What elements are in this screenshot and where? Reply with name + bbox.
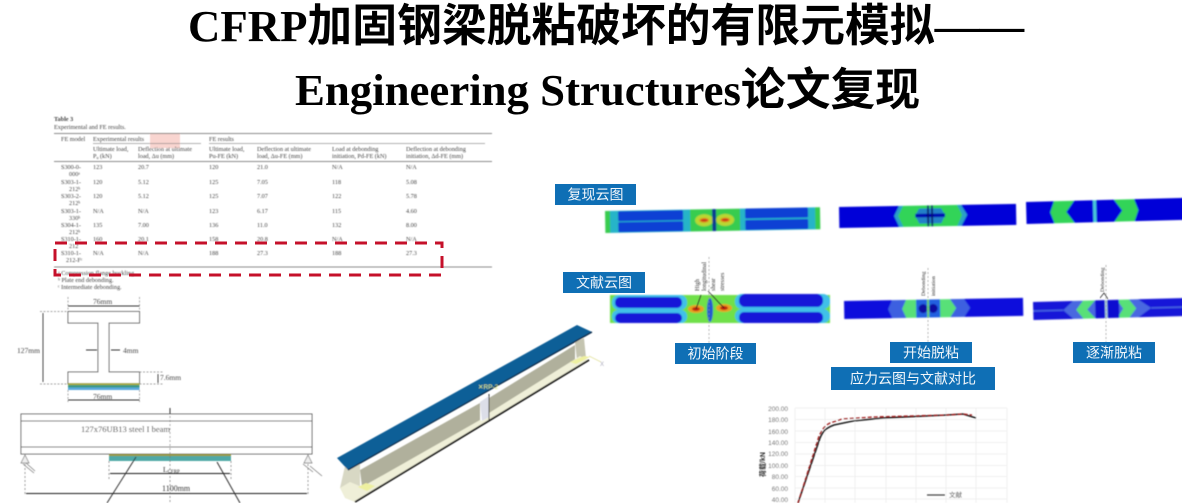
diagram: 3D FE beam model: [337, 325, 604, 502]
panel: results table: 000ᵃ: [69, 171, 80, 178]
chart: load-deflection curve: [758, 406, 1007, 503]
diagram: I-section dimensions: 76mm: [93, 392, 112, 401]
label: 文献云图: 文献云图: [576, 274, 632, 290]
panel: results table: ᵇ Plate end debonding.: [58, 277, 114, 284]
panel: results table: 5.12: [138, 179, 149, 186]
annotation: high longitudinal shear stresses: longitudinal: [702, 262, 708, 291]
annotation: debonding: Debonding: [1100, 267, 1106, 292]
panel: results table: 11.0: [257, 222, 268, 229]
callout: red dashed highlight box: [55, 243, 442, 275]
chart: load-deflection curve: 200.00: [768, 406, 788, 413]
diagram: I-section dimensions: 7.6mm: [160, 373, 181, 382]
label: 复现云图: 复现云图: [568, 186, 624, 202]
panel: results table: Pu-FE (kN): [209, 153, 238, 160]
panel: results table: 212ᵇ: [69, 229, 80, 236]
panel: results table: 125: [209, 193, 218, 200]
panel: results table: 160: [93, 236, 102, 243]
panel: results table: S303-1-: [61, 179, 81, 186]
panel: results table: 21.0: [257, 164, 268, 171]
panel: results table: u: [96, 155, 98, 160]
panel: results table: 188: [209, 250, 218, 257]
annotation: high longitudinal shear stresses: shear: [711, 278, 717, 291]
panel: results table: 212ᵇ: [69, 200, 80, 207]
panel: results table: 7.00: [138, 222, 149, 229]
panel: results table: Deflection at ultimate: [257, 146, 311, 153]
label: 开始脱粘: [890, 342, 972, 363]
panel: results table: 212ᵇ: [69, 186, 80, 193]
panel: results table: 330ᵇ: [69, 215, 80, 222]
panel: results table: N/A: [138, 250, 149, 257]
panel: results table: 123: [93, 164, 102, 171]
panel: results table: Ultimate load,: [93, 146, 129, 153]
diagram: I-section dimensions: [17, 297, 181, 402]
contour: literature debonding initiation: [844, 298, 1023, 319]
panel: results table: 5.08: [406, 179, 417, 186]
panel: results table: load, Δu-FE (mm): [257, 153, 302, 160]
annotation: debonding: [1100, 265, 1108, 342]
panel: results table: 120: [209, 164, 218, 171]
panel: results table: 5.12: [138, 193, 149, 200]
panel: results table: 7.05: [257, 179, 268, 186]
panel: results table: Experimental results: [93, 136, 145, 143]
annotation: high longitudinal shear stresses: High: [695, 279, 701, 291]
contour: reproduced progressive debonding: [1026, 198, 1182, 224]
panel: results table: N/A: [406, 164, 417, 171]
panel: results table: [54, 116, 492, 291]
panel: results table: S310-1-: [61, 236, 81, 243]
diagram: I-section dimensions: 76mm: [93, 297, 112, 306]
panel: results table: (kN): [98, 153, 112, 160]
panel: results table: FE model: [61, 136, 86, 143]
chart: load-deflection curve: 120.00: [768, 451, 788, 458]
annotation: debonding initiation: initiation: [931, 276, 937, 296]
chart: load-deflection curve: 100.00: [768, 463, 788, 470]
panel: results table: 120: [93, 193, 102, 200]
diagram: I-section dimensions: 4mm: [123, 346, 139, 355]
panel: results table: 4.60: [406, 208, 417, 215]
diagram: I-section dimensions: 127mm: [17, 346, 40, 355]
diagram: beam elevation with CFRP plate: 127x76UB13 steel I beam: [81, 424, 170, 434]
annotation: high longitudinal shear stresses: stresses: [720, 272, 726, 291]
title: CFRP加固钢梁脱粘破坏的有限元模拟——: [188, 1, 1025, 51]
panel: results table: 20.8: [257, 236, 268, 243]
panel: results table: 120: [93, 179, 102, 186]
panel: results table: N/A: [138, 208, 149, 215]
panel: results table: ᶜ Intermediate debonding.: [58, 284, 122, 291]
panel: results table: 27.3: [406, 250, 417, 257]
contour: reproduced debonding initiation: [839, 204, 1016, 228]
contour: reproduced initial stage: [605, 207, 820, 233]
panel: results table: 158: [209, 236, 218, 243]
panel: results table: P: [93, 153, 96, 160]
panel: results table: S300-0-: [61, 164, 81, 171]
panel: results table: N/A: [406, 236, 417, 243]
panel: results table: 125: [209, 179, 218, 186]
panel: results table: load, Δu (mm): [138, 153, 174, 160]
label: 复现云图: [555, 184, 636, 205]
diagram: beam elevation with CFRP plate: [21, 408, 322, 503]
panel: results table: N/A: [93, 250, 104, 257]
panel: results table: S303-1-: [61, 208, 81, 215]
panel: results table: 188: [332, 250, 341, 257]
contour: literature initial stage: [610, 294, 830, 323]
label: 开始脱粘: 开始脱粘: [903, 344, 959, 360]
panel: results table: 27.3: [257, 250, 268, 257]
panel: results table: 6.17: [257, 208, 268, 215]
panel: results table: initiation, Pd-FE (kN): [332, 153, 386, 160]
panel: results table: N/A: [93, 208, 104, 215]
panel: results table: 136: [209, 222, 218, 229]
label: 初始阶段: 初始阶段: [688, 346, 744, 362]
chart: load-deflection curve: 160.00: [768, 429, 788, 436]
panel: results table: S303-2-: [61, 193, 81, 200]
chart: load-deflection curve: 60.00: [772, 486, 788, 493]
diagram: 3D FE beam model: X: [600, 362, 604, 368]
diagram: 3D FE beam model: ✕RP-2: [478, 384, 499, 391]
title: Engineering Structures论文复现: [295, 65, 920, 115]
panel: results table: initiation, Δd-FE (mm): [406, 153, 463, 160]
annotation: debonding initiation: Debonding: [921, 271, 927, 296]
panel: results table: 122: [332, 193, 341, 200]
panel: results table: S304-1-: [61, 222, 81, 229]
panel: results table: 135: [93, 222, 102, 229]
label: 应力云图与文献对比: [831, 367, 995, 390]
contour: literature progressive debonding: [1033, 298, 1182, 320]
label: 应力云图与文献对比: 应力云图与文献对比: [850, 370, 976, 386]
chart: load-deflection curve: 80.00: [772, 474, 788, 481]
panel: results table: FE results: [209, 136, 235, 143]
label: 逐渐脱粘: [1073, 342, 1155, 363]
panel: results table: Table 3: [54, 116, 73, 123]
annotation: high longitudinal shear stresses: [695, 257, 726, 343]
panel: results table: 132: [332, 222, 341, 229]
panel: results table: Deflection at debonding: [406, 146, 466, 153]
panel: results table: N/A: [332, 236, 343, 243]
panel: results table: 8.00: [406, 222, 417, 229]
panel: results table: Load at debonding: [332, 146, 378, 153]
panel: results table: ᵃ Compression flange buckling.: [58, 270, 136, 277]
panel: results table: 20.1: [138, 236, 149, 243]
panel: results table: 7.07: [257, 193, 268, 200]
chart: load-deflection curve: 140.00: [768, 440, 788, 447]
panel: results table: 118: [332, 179, 341, 186]
label: 初始阶段: [675, 343, 756, 364]
panel: results table: N/A: [332, 164, 343, 171]
panel: results table: 212: [69, 243, 78, 250]
diagram: beam elevation with CFRP plate: 1100mm: [162, 484, 191, 493]
annotation: debonding initiation: [921, 268, 937, 342]
panel: results table: S310-1-: [61, 250, 81, 257]
diagram: beam elevation with CFRP plate: CFRP: [168, 470, 180, 475]
panel: results table: 123: [209, 208, 218, 215]
chart: load-deflection curve: 荷载/kN: [758, 452, 767, 477]
panel: results table: Deflection at ultimate: [138, 146, 192, 153]
label: 文献云图: [563, 272, 645, 293]
panel: results table: 20.7: [138, 164, 149, 171]
chart: load-deflection curve: 180.00: [768, 417, 788, 424]
panel: results table: 115: [332, 208, 341, 215]
label: 逐渐脱粘: 逐渐脱粘: [1086, 344, 1142, 360]
panel: results table: Ultimate load,: [209, 146, 245, 153]
panel: results table: 5.78: [406, 193, 417, 200]
panel: results table: 212-Fᶜ: [66, 257, 83, 264]
title: [188, 1, 1025, 115]
chart: load-deflection curve: 文献: [949, 490, 962, 499]
panel: results table: Experimental and FE results.: [54, 124, 126, 131]
diagram: beam elevation with CFRP plate: L: [163, 465, 168, 474]
